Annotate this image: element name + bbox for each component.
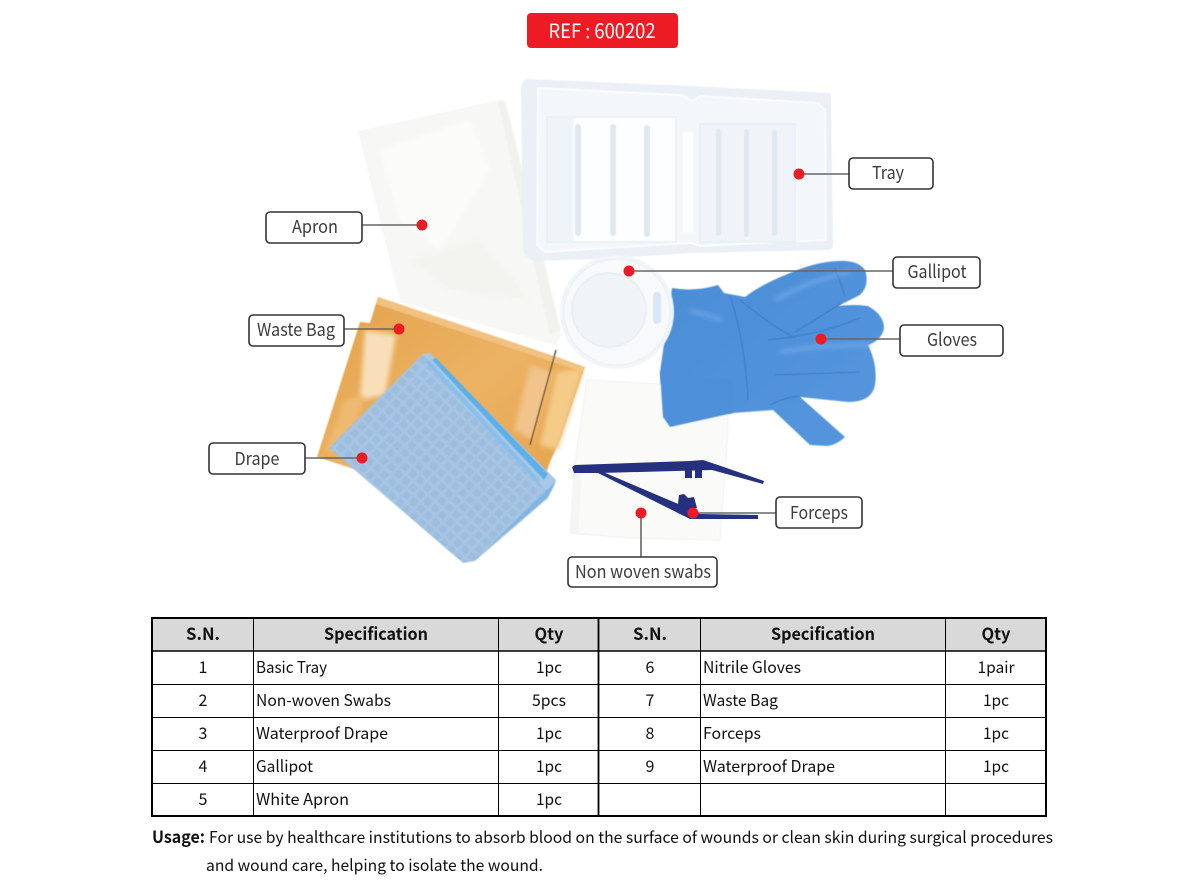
callout: Non woven swabs: Non woven swabs	[575, 558, 711, 584]
specification table: 1pc	[536, 720, 562, 744]
usage note: For use by healthcare institutions to absorb blood on the surface of wounds or clean skin during surgical procedures	[209, 824, 1053, 848]
product: white apron	[358, 99, 562, 345]
specification table: 7	[646, 687, 655, 711]
specification table: Nitrile Gloves	[703, 654, 801, 678]
specification table: 1	[199, 654, 207, 678]
specification table: 5pcs	[532, 687, 566, 711]
callout: Non woven swabs	[568, 508, 717, 587]
product: plastic tray	[521, 79, 833, 261]
specification table: 5	[199, 786, 208, 810]
specification table: Specification	[324, 620, 428, 645]
callout: Gallipot: Gallipot	[908, 258, 967, 284]
specification table: Waste Bag	[703, 687, 778, 711]
callout: Forceps	[688, 497, 862, 528]
specification table: 1pc	[983, 687, 1009, 711]
specification table: S.N.	[633, 620, 667, 645]
specification table: 1pc	[536, 786, 562, 810]
specification table: 2	[199, 687, 208, 711]
callout: Tray: Tray	[872, 159, 905, 185]
product: blue forceps	[572, 460, 764, 519]
specification table: Waterproof Drape	[703, 753, 835, 777]
specification table: 6	[646, 654, 655, 678]
product: non-woven swabs	[570, 380, 728, 540]
specification table: 8	[646, 720, 655, 744]
callout: Drape: Drape	[234, 445, 280, 471]
specification table: 1pc	[983, 720, 1009, 744]
specification table: Basic Tray	[256, 654, 328, 678]
callout: Apron: Apron	[292, 213, 338, 239]
specification table: Non-woven Swabs	[256, 687, 391, 711]
callout: Gloves: Gloves	[927, 326, 977, 352]
usage note: Usage:	[152, 823, 205, 848]
specification table: Waterproof Drape	[256, 720, 388, 744]
specification table: White Apron	[256, 786, 349, 810]
callout: Gallipot	[624, 257, 980, 288]
product: blue nitrile gloves	[660, 261, 884, 446]
callout: Forceps: Forceps	[790, 499, 848, 525]
callout: Tray	[794, 158, 933, 189]
product: re-drawn glove cuff overlapping the swabs	[660, 372, 733, 427]
specification table: Qty	[982, 620, 1011, 645]
specification table: S.N.	[186, 620, 220, 645]
callout: Drape	[209, 443, 368, 474]
specification table: 4	[199, 753, 208, 777]
specification table: 3	[199, 720, 207, 744]
callout: Apron	[266, 212, 428, 243]
specification table: Specification	[771, 620, 875, 645]
reference badge: REF : 600202	[548, 15, 656, 44]
specification table: Qty	[534, 620, 564, 645]
product: blue drape	[329, 353, 556, 563]
specification table: 9	[646, 753, 655, 777]
callout: Gloves	[816, 325, 1003, 356]
reference badge	[527, 13, 678, 48]
usage note: and wound care, helping to isolate the wound.	[206, 852, 543, 876]
callout: Waste Bag: Waste Bag	[257, 316, 335, 342]
specification table: 1pc	[536, 753, 562, 777]
specification table: 1pair	[978, 654, 1015, 678]
callout: Waste Bag	[249, 315, 404, 346]
product: orange waste bag	[317, 297, 585, 510]
specification table: Forceps	[703, 720, 761, 744]
specification table: 1pc	[983, 753, 1009, 777]
product: gallipot	[560, 255, 674, 369]
usage note	[152, 823, 1053, 876]
specification table: 1pc	[536, 654, 562, 678]
specification table: Gallipot	[256, 753, 313, 777]
specification table	[152, 618, 1046, 816]
